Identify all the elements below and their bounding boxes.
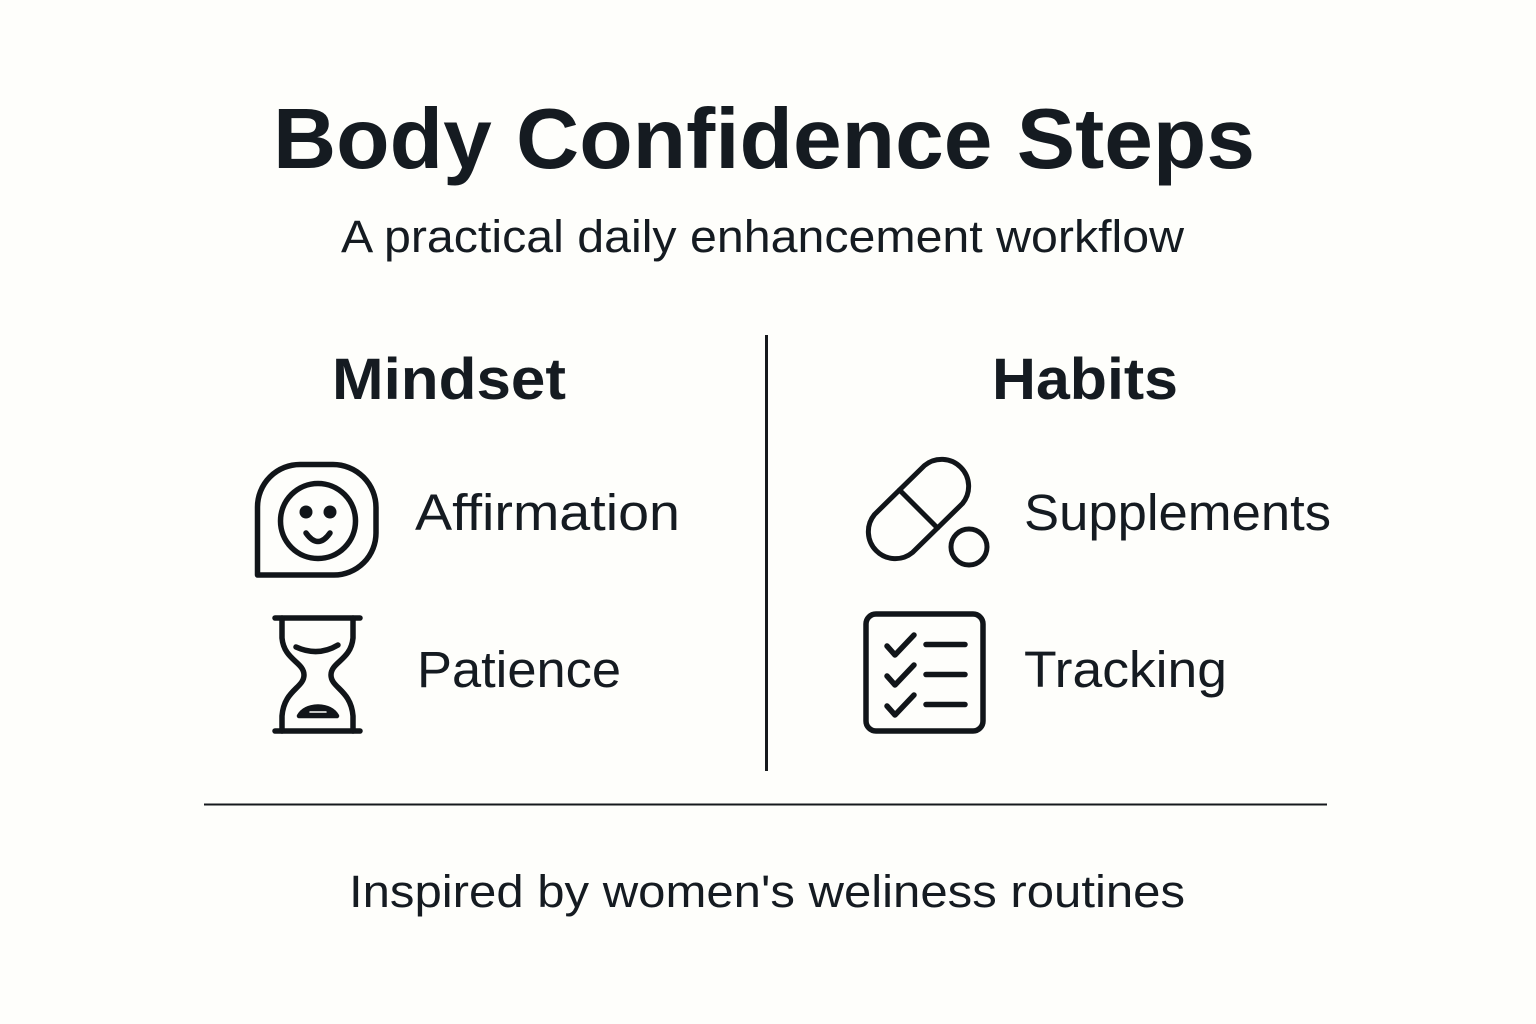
title: Body Confidence Steps: [273, 92, 1255, 187]
label: affirmation: Affirmation: [415, 484, 680, 541]
icon: capsule and pill: [868, 459, 987, 565]
heading: habits: Habits: [992, 347, 1178, 412]
column divider: [765, 335, 768, 771]
heading: mindset: Mindset: [332, 347, 566, 412]
panel: mindset: [258, 347, 680, 731]
label: supplements: Supplements: [1024, 484, 1331, 541]
icon: smiling speech bubble: [258, 464, 376, 575]
panel: habits: [866, 347, 1331, 731]
icon: checklist: [866, 614, 983, 731]
icon: hourglass: [275, 618, 360, 731]
footer divider: [204, 804, 1327, 806]
label: tracking: Tracking: [1024, 641, 1227, 698]
footer note: Inspired by women's weliness routines: [349, 866, 1185, 917]
label: patience: Patience: [417, 641, 621, 698]
subtitle: A practical daily enhancement workflow: [341, 211, 1185, 262]
